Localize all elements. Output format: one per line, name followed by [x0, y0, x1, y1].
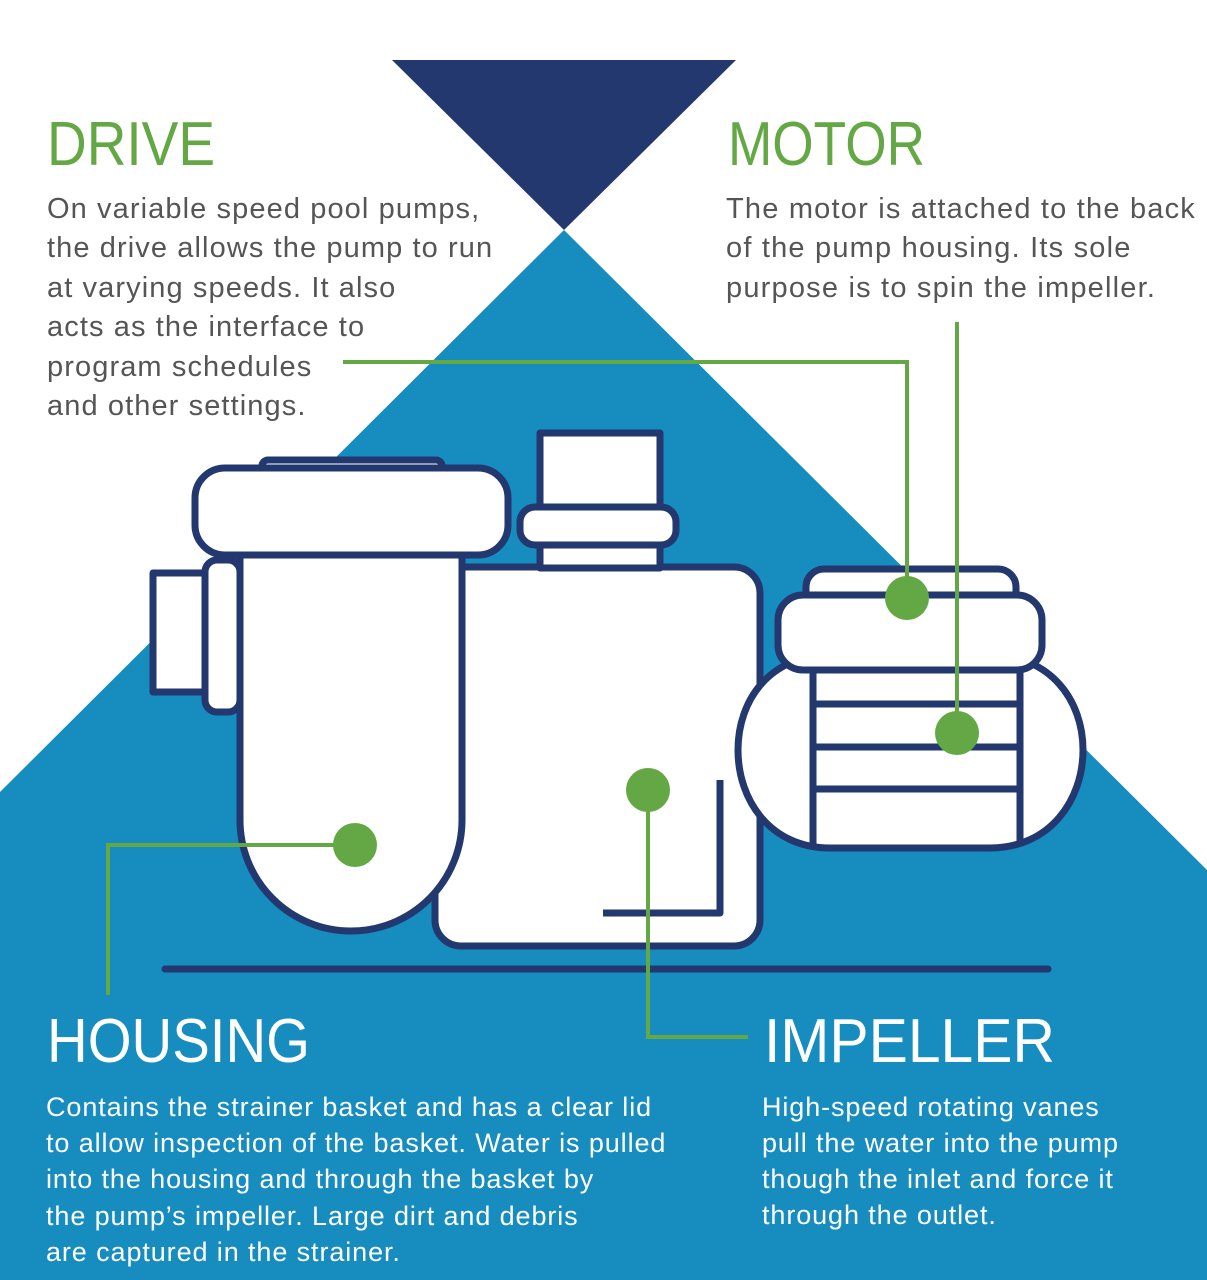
base line — [165, 966, 1048, 972]
text: housing: are captured in the strainer. — [46, 1237, 401, 1267]
text: housing: Contains the strainer basket and has a clear lid — [46, 1092, 652, 1122]
heading: motor: MOTOR — [728, 110, 925, 179]
leader: housing — [108, 823, 377, 995]
inner corner line — [603, 780, 720, 913]
text: drive: at varying speeds. It also — [47, 272, 396, 304]
text: drive: and other settings. — [47, 390, 306, 422]
text: drive: the drive allows the pump to run — [47, 232, 493, 264]
outlet pipe — [520, 433, 676, 568]
pump illustration — [153, 433, 1083, 946]
text: housing: to allow inspection of the basket. Water is pulled — [46, 1128, 666, 1158]
heading: impeller: IMPELLER — [764, 1007, 1055, 1076]
pump body — [435, 567, 760, 946]
left inlet — [153, 560, 240, 712]
text: impeller: High-speed rotating vanes — [762, 1092, 1100, 1122]
text: drive: On variable speed pool pumps, — [47, 193, 480, 225]
heading: housing: HOUSING — [47, 1007, 310, 1076]
text: impeller: pull the water into the pump — [762, 1128, 1119, 1158]
lid — [195, 460, 508, 555]
text: housing: the pump’s impeller. Large dirt and debris — [46, 1201, 579, 1231]
heading: drive: DRIVE — [47, 110, 215, 179]
text: housing: into the housing and through the basket by — [46, 1164, 594, 1194]
text: motor: The motor is attached to the back — [726, 193, 1196, 225]
leader: motor — [935, 322, 979, 755]
housing — [240, 550, 462, 931]
text: impeller: through the outlet. — [762, 1200, 997, 1230]
leader: impeller — [626, 768, 748, 1037]
text: impeller: though the inlet and force it — [762, 1164, 1114, 1194]
text: motor: purpose is to spin the impeller. — [726, 272, 1156, 304]
leader: drive — [343, 362, 929, 620]
motor — [738, 569, 1083, 848]
text: motor: of the pump housing. Its sole — [726, 232, 1132, 264]
text: drive: acts as the interface to — [47, 311, 365, 343]
navy triangle — [392, 60, 736, 230]
text: drive: program schedules — [47, 351, 312, 383]
